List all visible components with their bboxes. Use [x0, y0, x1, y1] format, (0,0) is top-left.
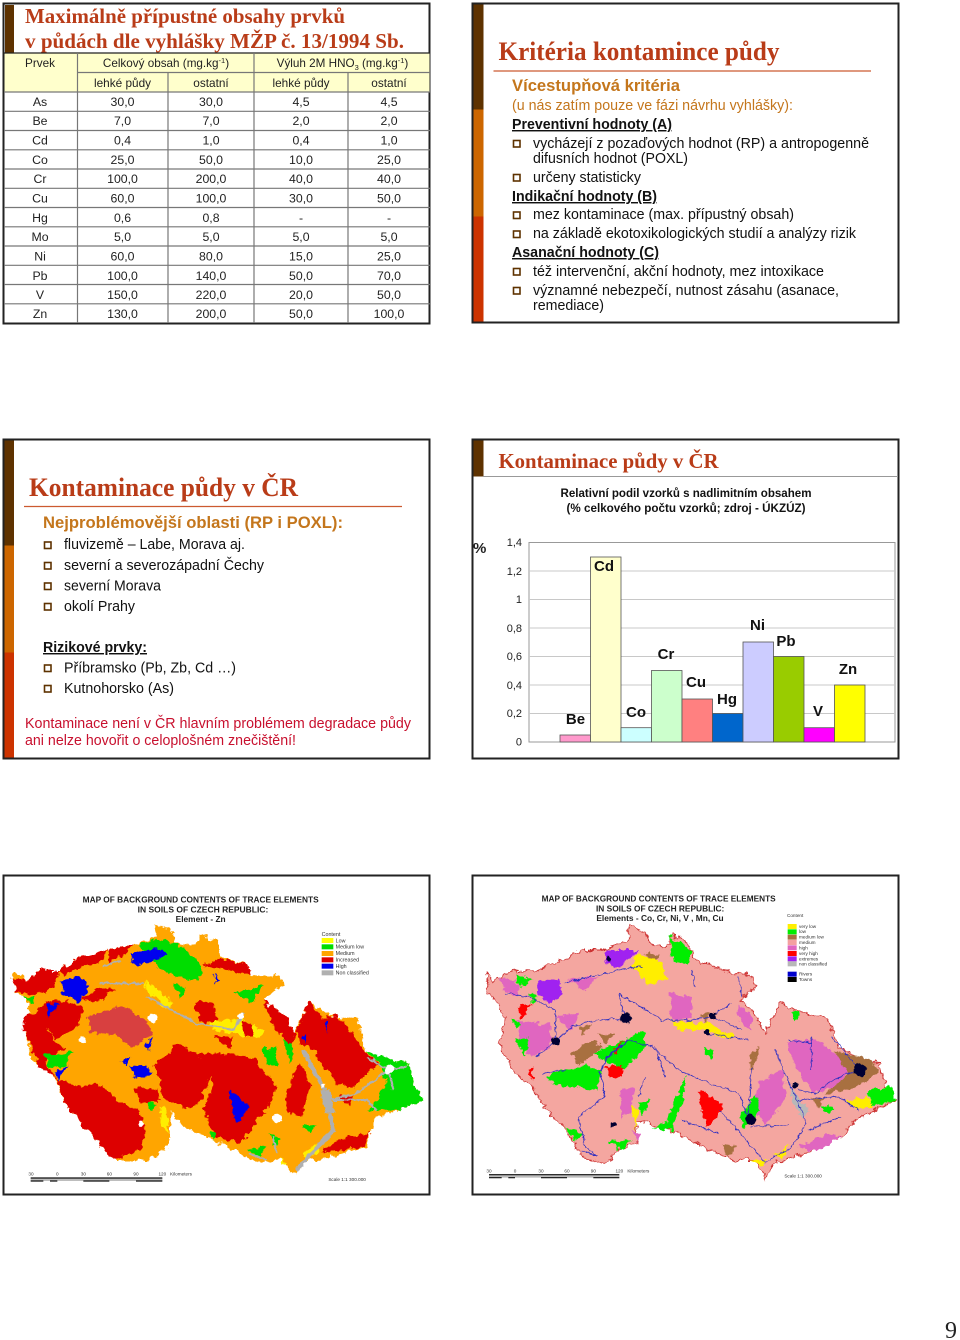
table: element limits: - — [387, 211, 391, 225]
table: element limits: 25,0 — [377, 153, 401, 167]
text block: criteria levels: vycházejí z pozaďových hodnot (RP) a antropogenně — [533, 136, 869, 152]
text block: criteria levels: remediace) — [533, 298, 604, 314]
panel: bar chart slide — [472, 440, 898, 758]
table: element limits: 10,0 — [289, 153, 313, 167]
title: maximum permitted contents — [25, 4, 404, 53]
map regions: multi-element — [487, 925, 895, 1178]
bar chart: 0,4 — [507, 680, 522, 692]
list: areas: severní Morava — [64, 578, 162, 594]
table: element limits: Hg — [32, 211, 48, 225]
table: element limits: ostatní — [371, 76, 407, 90]
map legend: multi-element: Content — [787, 913, 804, 918]
bar chart: Ni — [750, 617, 765, 634]
map legend: multi-element: medium — [799, 940, 816, 945]
bar chart: Cu — [686, 674, 706, 691]
map legend: multi-element: extremes — [799, 956, 819, 961]
callout: conclusion in red: Kontaminace není v ČR hlavním problémem degradace půdy — [25, 715, 412, 732]
scale bar: Zn: Kilometers — [170, 1172, 193, 1177]
list: areas: fluvizemě – Labe, Morava aj. — [64, 537, 245, 553]
table: element limits: 1,0 — [380, 134, 398, 148]
table: element limits: ) — [225, 57, 229, 70]
chart title: (% celkového počtu vzorků; zdroj - ÚKZÚZ) — [566, 502, 806, 515]
table: element limits: - — [299, 211, 303, 225]
towns: Zn — [79, 1013, 394, 1126]
map regions: Zn — [12, 925, 423, 1177]
table: element limits: Pb — [32, 269, 48, 283]
panel: multi-element map slide — [472, 876, 898, 1194]
map legend: Zn: Increased — [336, 958, 359, 964]
map title: multi-element: IN SOILS OF CZECH REPUBLIC: — [596, 903, 724, 913]
table: element limits: -1 — [398, 56, 404, 65]
table: element limits — [4, 53, 430, 323]
table: element limits: 40,0 — [289, 172, 313, 186]
table: element limits: 100,0 — [107, 172, 138, 186]
title: contamination chart: Kontaminace půdy v ČR — [498, 449, 719, 473]
scale bar: Zn: 60 — [107, 1172, 112, 1177]
bar chart: 0 — [516, 736, 522, 748]
rivers classified grey: Zn — [100, 960, 407, 1170]
bar chart: 0,6 — [507, 651, 522, 663]
table: element limits: 30,0 — [199, 95, 223, 109]
table: element limits: 4,5 — [380, 95, 398, 109]
bar chart: 1,2 — [507, 566, 522, 578]
scale bar: multi-element: 60 — [564, 1169, 570, 1174]
table: element limits: 15,0 — [289, 250, 313, 264]
text block: criteria levels: Indikační hodnoty (B) — [512, 189, 657, 205]
scale bar: Zn: 30 — [28, 1172, 34, 1177]
table: element limits: Ni — [34, 250, 46, 264]
bar chart: Co — [626, 704, 646, 721]
text block: criteria levels: Preventivní hodnoty (A) — [512, 117, 672, 133]
bar chart: Pb — [776, 633, 796, 650]
map legend: Zn — [322, 932, 369, 977]
map legend: Zn: Non classified — [336, 971, 369, 977]
table: element limits: 50,0 — [377, 288, 401, 302]
bar chart: Zn — [839, 661, 857, 678]
scale bar: multi-element: 0 — [514, 1169, 517, 1174]
table: element limits: 130,0 — [107, 307, 138, 321]
text block: criteria levels: významné nebezpečí, nutnost zásahu (asanace, — [533, 283, 839, 299]
subheading: multi-level criteria: Vícestupňová kritéria — [512, 77, 681, 95]
table: element limits: 80,0 — [199, 250, 223, 264]
table: element limits: 2,0 — [380, 114, 398, 128]
list: risk elements: Rizikové prvky: — [43, 640, 147, 656]
map legend: multi-element: non classified — [799, 961, 828, 966]
scale bar: Zn: Scale 1:1 300.000 — [328, 1177, 366, 1182]
table: element limits: 150,0 — [107, 288, 138, 302]
map legend: Zn: Medium low — [336, 945, 364, 951]
scale bar: Zn: 30 — [81, 1172, 86, 1177]
map title: multi-element: Elements - Co, Cr, Ni, V , Mn, Cu — [596, 913, 724, 923]
map title: multi-element: MAP OF BACKGROUND CONTENTS OF TRACE ELEMENTS — [542, 894, 776, 904]
table: element limits: 5,0 — [292, 230, 310, 244]
subheading: most problematic areas: Nejproblémovější oblasti (RP i POXL): — [43, 514, 343, 532]
scale bar: multi-element: Kilometers — [627, 1169, 650, 1174]
table: element limits: 2,0 — [292, 114, 310, 128]
scale bar: multi-element — [486, 1169, 822, 1179]
table: element limits: lehké půdy — [94, 76, 151, 90]
panel: Zn map slide — [4, 876, 430, 1194]
bar chart: 0,2 — [507, 708, 522, 720]
subheading: multi-level criteria — [512, 77, 793, 114]
table: element limits: Prvek — [25, 56, 56, 70]
table: element limits: Cd — [32, 134, 48, 148]
table: element limits: 5,0 — [114, 230, 131, 244]
table: element limits: 70,0 — [377, 269, 401, 283]
list: risk elements — [43, 640, 236, 697]
table: element limits: 50,0 — [289, 269, 313, 283]
text block: criteria levels: na základě ekotoxikologických studií a analýzy rizik — [533, 226, 857, 242]
table: element limits: 20,0 — [289, 288, 313, 302]
rivers: multi-element — [505, 967, 860, 1163]
map: Zn — [12, 895, 423, 1182]
table: element limits: ) — [404, 57, 408, 70]
table: element limits: 3 — [355, 63, 359, 72]
table: element limits: Celkový obsah (mg.kg — [103, 57, 219, 70]
bar chart: Hg — [717, 691, 737, 708]
table: element limits: Cr — [34, 172, 46, 186]
table: element limits: 5,0 — [202, 230, 220, 244]
text block: criteria levels: difusních hodnot (POXL) — [533, 151, 688, 167]
bar chart: % — [473, 540, 486, 557]
towns: multi-element — [551, 956, 866, 1127]
map legend: multi-element: medium low — [799, 935, 824, 940]
map title: Zn: Element - Zn — [176, 914, 226, 924]
table: element limits: 50,0 — [377, 192, 401, 206]
table: element limits: Výluh 2M HNO — [277, 57, 355, 70]
title: criteria: Kritéria kontamince půdy — [498, 37, 780, 66]
table: element limits: 140,0 — [196, 269, 227, 283]
table: element limits: 60,0 — [111, 192, 135, 206]
table: element limits: Zn — [33, 307, 47, 321]
bar chart: 1,4 — [507, 537, 522, 549]
map legend: multi-element: low — [799, 929, 807, 934]
list: areas: severní a severozápadní Čechy — [64, 557, 265, 574]
map legend: Zn: High — [336, 964, 347, 970]
table: element limits: 50,0 — [289, 307, 313, 321]
scale bar: Zn: 90 — [133, 1172, 139, 1177]
table: element limits: 60,0 — [111, 250, 135, 264]
scale bar: multi-element: 90 — [591, 1169, 596, 1174]
table: element limits: -1 — [219, 56, 225, 65]
table: element limits: 0,4 — [292, 134, 310, 148]
table: element limits: Mo — [31, 230, 49, 244]
table: element limits: ostatní — [193, 76, 229, 90]
table: element limits: Cu — [32, 192, 48, 206]
table: element limits: 200,0 — [196, 172, 227, 186]
panel: contamination in the Czech Republic — [4, 440, 430, 758]
chart title — [560, 488, 812, 515]
table: element limits: 4,5 — [292, 95, 310, 109]
scale bar: multi-element: 120 — [615, 1169, 624, 1174]
scale bar: Zn: 0 — [56, 1172, 59, 1177]
callout: conclusion in red — [25, 715, 412, 749]
bar chart: V — [813, 703, 823, 720]
table: element limits: 0,8 — [202, 211, 220, 225]
text block: criteria levels: mez kontaminace (max. přípustný obsah) — [533, 207, 794, 223]
table: element limits: 7,0 — [114, 114, 131, 128]
table: element limits: Be — [32, 114, 48, 128]
title: maximum permitted contents: v půdách dle vyhlášky MŽP č. 13/1994 Sb. — [25, 29, 404, 53]
map legend: multi-element: high — [799, 945, 808, 950]
map legend: multi-element: Towns — [799, 977, 813, 982]
map legend: multi-element — [787, 913, 828, 982]
table: element limits: 1,0 — [202, 134, 220, 148]
table: element limits: As — [33, 95, 47, 109]
table: element limits: 30,0 — [289, 192, 313, 206]
title: contamination: Kontaminace půdy v ČR — [29, 473, 298, 502]
table: element limits: 5,0 — [380, 230, 398, 244]
map legend: multi-element: Rivers — [799, 972, 813, 977]
panel: contamination criteria — [472, 4, 898, 322]
map title: Zn — [83, 895, 319, 924]
text block: criteria levels — [512, 117, 869, 314]
text block: criteria levels: též intervenční, akční hodnoty, mez intoxikace — [533, 264, 824, 280]
table: element limits: 0,6 — [114, 211, 131, 225]
table: element limits: 50,0 — [199, 153, 223, 167]
map title: Zn: MAP OF BACKGROUND CONTENTS OF TRACE ELEMENTS — [83, 895, 319, 905]
scale bar: multi-element: 30 — [486, 1169, 492, 1174]
map legend: multi-element: very high — [799, 951, 818, 956]
list: risk elements: Příbramsko (Pb, Zb, Cd …) — [64, 660, 236, 676]
table: element limits: 100,0 — [196, 192, 227, 206]
title: maximum permitted contents: Maximálně přípustné obsahy prvků — [25, 4, 345, 28]
bar chart: Cd — [594, 558, 614, 575]
table: element limits: 25,0 — [377, 250, 401, 264]
map legend: Zn: Content — [322, 932, 341, 938]
bar chart: Be — [566, 711, 585, 728]
bar chart — [473, 537, 895, 748]
list: risk elements: Kutnohorsko (As) — [64, 681, 174, 697]
table: element limits: Co — [32, 153, 48, 167]
map legend: Zn: Low — [336, 938, 346, 944]
chart title: Relativní podil vzorků s nadlimitním obsahem — [560, 488, 812, 500]
table: element limits: 220,0 — [196, 288, 227, 302]
list: areas — [44, 537, 265, 615]
table: element limits: 7,0 — [202, 114, 220, 128]
table: element limits: V — [36, 288, 45, 302]
table: element limits: 25,0 — [111, 153, 135, 167]
subheading: multi-level criteria: (u nás zatím pouze ve fázi návrhu vyhlášky): — [512, 98, 793, 114]
map title: multi-element — [542, 894, 776, 923]
table: element limits: (mg.kg — [359, 57, 398, 70]
table: element limits: 200,0 — [196, 307, 227, 321]
table: element limits: 30,0 — [111, 95, 135, 109]
text block: criteria levels: Asanační hodnoty (C) — [512, 245, 659, 261]
table: element limits: 100,0 — [374, 307, 405, 321]
table: element limits: lehké půdy — [272, 76, 330, 90]
table: element limits: 100,0 — [107, 269, 138, 283]
bar chart: Cr — [658, 646, 674, 663]
map legend: multi-element: very low — [799, 924, 817, 929]
bar chart: 0,8 — [507, 623, 522, 635]
map title: Zn: IN SOILS OF CZECH REPUBLIC: — [138, 904, 268, 914]
table: element limits: 40,0 — [377, 172, 401, 186]
text block: criteria levels: určeny statisticky — [533, 170, 642, 186]
scale bar: multi-element: Scale 1:1 300.000 — [784, 1174, 822, 1179]
table: element limits: 0,4 — [114, 134, 131, 148]
callout: conclusion in red: ani nelze hovořit o celoplošném znečištění! — [25, 733, 296, 749]
panel: limits table — [4, 4, 430, 324]
map legend: Zn: Medium — [336, 951, 355, 957]
bar chart: 1 — [516, 594, 522, 606]
list: areas: okolí Prahy — [64, 599, 136, 615]
scale bar: multi-element: 30 — [538, 1169, 544, 1174]
scale bar: Zn: 120 — [158, 1172, 167, 1177]
scale bar: Zn — [28, 1172, 366, 1182]
map: Co Cr Ni V Mn Cu — [486, 894, 895, 1179]
